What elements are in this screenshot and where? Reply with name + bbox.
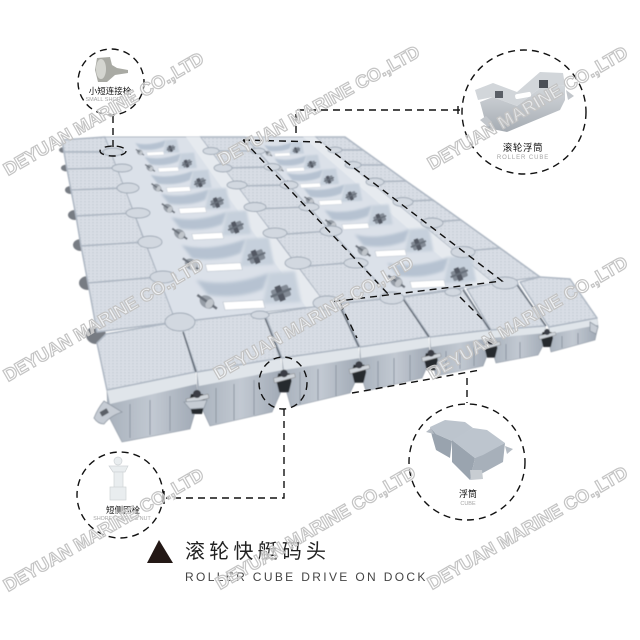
watermarks: DEYUAN MARINE CO.,LTD [214,42,423,169]
column 4 cubes [200,137,392,305]
callout: cube: CUBE [460,501,476,507]
callout: roller cube: ROLLER CUBE [497,155,549,161]
watermarks: DEYUAN MARINE CO.,LTD [0,48,207,179]
callout: cube [409,404,525,520]
front row cubes [97,277,597,390]
mooring lugs [94,322,598,424]
callout: shore screw and nut [77,452,163,538]
dashed leader: shore screw [164,357,307,504]
front cube side faces [107,318,598,442]
roller deck right [245,137,493,298]
icon: roller cube [475,72,574,132]
roller deck left [105,137,326,322]
title english: ROLLER CUBE DRIVE ON DOCK [185,570,428,584]
icon: shore screw [109,457,128,500]
callout: small short pin: 小短连接栓 [89,86,132,96]
watermarks: DEYUAN MARINE CO.,LTD [0,464,207,595]
dashed leader: cube [352,370,480,403]
callout: roller cube [462,50,586,174]
connector discs [103,147,518,331]
column 7 cubes [315,137,540,283]
watermarks: DEYUAN MARINE CO.,LTD [0,254,207,385]
title chinese: 滚轮快艇码头 [185,540,330,563]
callout: shore screw and nut: 短侧固栓 [106,505,140,515]
watermarks: DEYUAN MARINE CO.,LTD [424,462,631,593]
dashed roller section outline [243,140,502,338]
callout: cube: 浮筒 [459,488,477,499]
watermarks: DEYUAN MARINE CO.,LTD [424,252,631,383]
callout: shore screw and nut: SHORE SCREW & NUT [93,516,151,522]
watermarks: DEYUAN MARINE CO.,LTD [210,252,417,383]
title marker triangle [147,540,173,563]
dashed leader: small short pin [100,116,126,156]
icon: twin cubes [426,420,513,480]
column 1 cubes [62,137,176,332]
side fasteners between cubes [186,329,556,414]
callout: roller cube: 滚轮浮筒 [503,142,543,154]
floating dock [59,137,598,442]
icon: short pin [95,57,128,82]
left edge joints [59,147,106,344]
callout: small short pin: SMALL SHORT PIN [85,97,135,103]
watermarks: DEYUAN MARINE CO.,LTD [424,42,631,173]
dashed leader: roller cube [296,106,460,137]
callout: small short pin [78,49,144,115]
watermarks: DEYUAN MARINE CO.,LTD [212,462,419,593]
